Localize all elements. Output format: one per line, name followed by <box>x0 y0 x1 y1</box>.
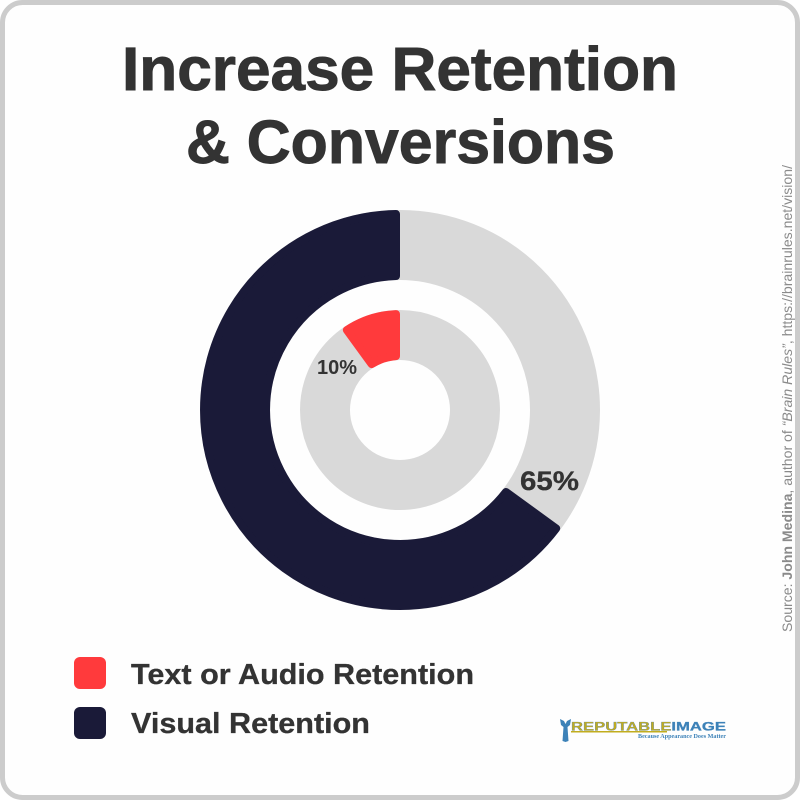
logo wordmark: REPUTABLE IMAGE <box>571 720 726 734</box>
source note: Source: John Medina, author of “Brain Rules”, https://brainrules.net/vision/ <box>779 165 795 632</box>
outer ring track <box>235 245 565 575</box>
legend swatch: text or audio <box>74 657 106 689</box>
label: 10%: 10% <box>317 357 357 379</box>
legend label: text or audio: Text or Audio Retention <box>131 659 474 691</box>
logo underline <box>571 731 667 732</box>
legend swatch: visual <box>74 707 106 739</box>
inner ring track <box>325 335 475 485</box>
title <box>122 35 678 176</box>
title: Increase Retention <box>122 35 678 103</box>
icon: necktie <box>560 719 571 742</box>
label: 65%: 65% <box>520 466 579 496</box>
logo tagline: Because Appearance Does Matter <box>638 733 726 740</box>
donut chart <box>204 214 579 606</box>
legend <box>74 657 474 740</box>
inner ring segment: text or audio retention 10% <box>347 314 396 364</box>
logo: Reputable Image <box>560 719 726 742</box>
outer ring segment: visual retention 65% <box>204 214 556 606</box>
title: & Conversions <box>186 108 615 176</box>
legend label: visual: Visual Retention <box>131 708 370 740</box>
